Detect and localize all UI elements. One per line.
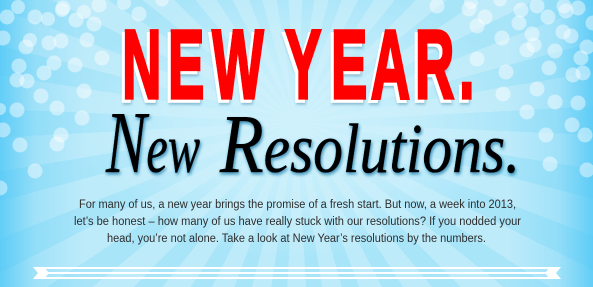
subtitle: New Resolutions. xyxy=(105,95,520,192)
bokeh dots xyxy=(0,0,593,196)
intro paragraph xyxy=(74,199,521,245)
subtitle: New Resolutions.: New xyxy=(105,95,200,192)
intro paragraph: For many of us, a new year brings the promise of a fresh start. But now, a week into 2013, xyxy=(79,199,516,211)
ribbon divider xyxy=(33,267,561,279)
intro paragraph: let’s be honest – how many of us have really stuck with our resolutions? If you nodded your xyxy=(74,216,521,228)
subtitle: New Resolutions.: Resolutions. xyxy=(219,98,520,191)
title: New Year.: NEW YEAR. xyxy=(0,10,474,119)
intro paragraph: head, you’re not alone. Take a look at New Year’s resolutions by the numbers. xyxy=(107,233,486,245)
